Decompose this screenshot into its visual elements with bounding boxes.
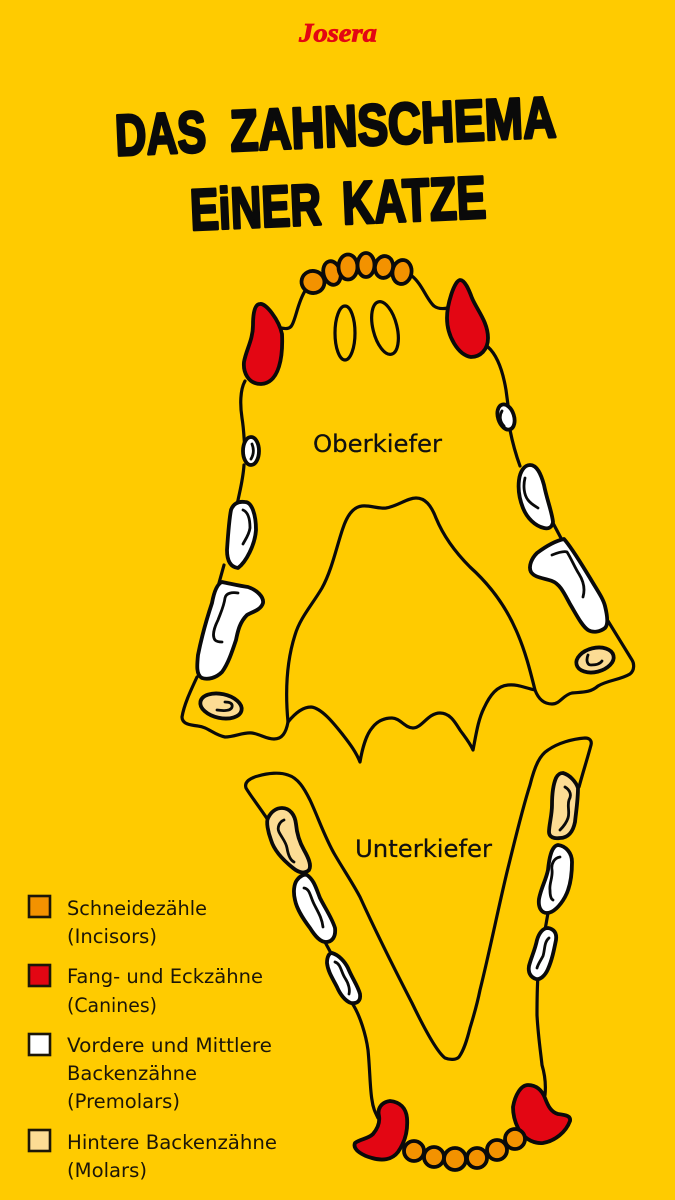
upper premolars right xyxy=(494,402,607,632)
legend xyxy=(29,896,277,1182)
upper premolars left xyxy=(197,437,263,679)
lower jaw: Unterkiefer xyxy=(246,738,591,1170)
lower jaw outline xyxy=(246,738,591,1118)
logo: Josera: Josera xyxy=(298,18,377,48)
legend item: canines: Fang- und Eckzähne xyxy=(67,965,263,988)
legend item: premolars: (Premolars) xyxy=(67,1090,180,1113)
upper incisors xyxy=(299,253,413,296)
title: KATZE xyxy=(341,164,487,237)
lower premolars xyxy=(294,845,572,1003)
legend item: molars: Hintere Backenzähne xyxy=(67,1131,277,1154)
upper jaw outline xyxy=(182,276,634,762)
title xyxy=(114,85,557,243)
legend item: incisors: (Incisors) xyxy=(67,925,157,948)
lower incisors xyxy=(404,1129,525,1170)
upper molars xyxy=(198,644,616,722)
legend item: molars: (Molars) xyxy=(67,1159,147,1182)
legend item: incisors: Schneidezähle xyxy=(67,897,207,920)
lower canines xyxy=(355,1085,570,1160)
legend item: premolars: Backenzähne xyxy=(67,1062,197,1085)
legend item: premolars: Vordere und Mittlere xyxy=(67,1034,272,1057)
upper jaw: Oberkiefer xyxy=(182,253,634,762)
lower molars xyxy=(267,773,578,872)
title: EiNER xyxy=(189,172,322,243)
upper canines xyxy=(244,280,488,384)
label: Unterkiefer: Unterkiefer xyxy=(355,835,492,863)
title: ZAHNSCHEMA xyxy=(229,85,557,164)
legend item: premolars xyxy=(29,1034,272,1113)
title: DAS xyxy=(114,100,207,168)
legend item: canines: (Canines) xyxy=(67,994,157,1017)
legend item: incisors xyxy=(29,896,207,948)
label: Oberkiefer: Oberkiefer xyxy=(313,430,442,458)
legend item: canines xyxy=(29,965,263,1017)
nostrils xyxy=(335,299,403,360)
legend item: molars xyxy=(29,1130,277,1182)
